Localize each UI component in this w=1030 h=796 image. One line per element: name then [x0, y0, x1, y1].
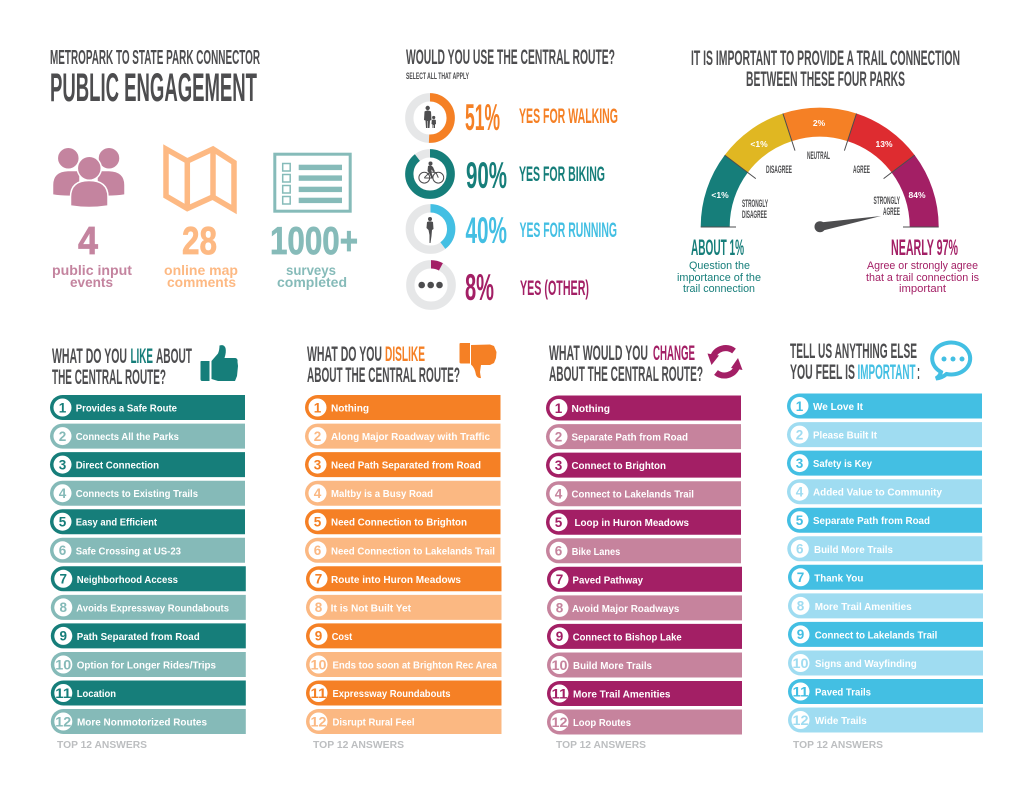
donut: 40%: [410, 208, 451, 250]
gauge chart: 13%: [875, 139, 893, 149]
gauge chart: DISAGREE: [742, 209, 767, 221]
row 8: It is Not Built Yet: [331, 603, 412, 614]
panel: biking: [409, 153, 605, 196]
text: WOULD YOU USE THE CENTRAL ROUTE?: [406, 46, 615, 69]
callout: nearly 97%: that a trail connection is: [866, 272, 979, 284]
row 7: [51, 566, 246, 591]
panel: other: [410, 264, 589, 308]
row 4: Maltby is a Busy Road: [331, 489, 433, 500]
text: YES FOR RUNNING: [520, 219, 617, 242]
panel: biking: 90%: [466, 155, 507, 196]
callout: nearly 97%: NEARLY 97%: [891, 235, 958, 260]
row 8: [306, 595, 502, 620]
icon: thumbs down: [460, 343, 496, 378]
row 1: [546, 396, 741, 420]
icon: people: [52, 147, 125, 208]
row 8: 8: [315, 600, 323, 615]
row 9: [547, 624, 742, 649]
row 8: [51, 595, 246, 620]
row 2: [50, 424, 245, 449]
heading: tell us anything else: [790, 340, 920, 384]
row 6: 6: [59, 543, 67, 558]
row 7: 7: [60, 572, 67, 587]
footnote: TOP 12 ANSWERS: [556, 739, 646, 751]
callout: nearly 97%: important: [899, 283, 946, 295]
gauge chart: NEUTRAL: [807, 150, 830, 162]
panel: walking: 51%: [465, 97, 500, 138]
row 4: [50, 481, 245, 506]
stat: surveys completed: 1000+: [270, 220, 358, 263]
row 4: 4: [796, 485, 804, 500]
row 10: [788, 650, 983, 676]
row 7: Route into Huron Meadows: [331, 575, 461, 586]
row 11: [788, 679, 983, 704]
heading: what do you like: [52, 345, 192, 389]
heading: what would you change: CHANGE: [653, 342, 695, 365]
row 12: 12: [310, 714, 326, 729]
stat: online map comments: 28: [182, 220, 217, 263]
row 1: Provides a Safe Route: [76, 404, 177, 414]
row 11: [306, 680, 502, 706]
row 2: 2: [314, 429, 321, 444]
row 10: Ends too soon at Brighton Rec Area: [332, 660, 497, 672]
row 1: Nothing: [331, 404, 369, 414]
row 2: [546, 424, 741, 449]
row 1: [787, 394, 982, 418]
heading: what do you like: WHAT DO YOU: [52, 345, 127, 368]
row 4: [787, 479, 982, 504]
gauge chart: 84%: [908, 190, 926, 200]
row 9: Cost: [332, 632, 353, 643]
row 5: 5: [314, 515, 322, 530]
row 6: [50, 538, 245, 563]
icon: map: [166, 149, 234, 210]
row 12: Wide Trails: [815, 716, 867, 727]
row 5: Loop in Huron Meadows: [574, 518, 689, 529]
stat: surveys completed: surveys: [286, 262, 336, 278]
row 12: [547, 710, 742, 734]
row 6: Need Connection to Lakelands Trail: [331, 546, 495, 557]
gauge chart: AGREE: [883, 206, 900, 218]
title: [50, 46, 260, 110]
row 12: More Nonmotorized Routes: [77, 718, 207, 728]
panel: walking: [409, 97, 618, 139]
row 5: 5: [59, 515, 67, 530]
callout: about 1%: trail connection: [683, 283, 755, 295]
icon: survey form: [275, 154, 350, 211]
row 3: [50, 452, 245, 477]
row 12: 12: [792, 713, 808, 728]
donut: 90%: [409, 153, 451, 195]
row 3: 3: [555, 458, 563, 473]
row 11: More Trail Amenities: [573, 690, 671, 700]
callout: nearly 97%: [866, 235, 979, 295]
icon: cycle arrows: [708, 348, 742, 375]
row 10: [51, 652, 246, 677]
row 3: Direct Connection: [76, 461, 159, 472]
row 7: 7: [556, 572, 563, 587]
panel: like: ABOUT: [156, 345, 192, 368]
icon: thumbs up: [200, 345, 238, 381]
heading: would you use the central route: SELECT ALL THAT APPLY: [406, 71, 469, 82]
row 6: [787, 536, 982, 561]
stat: online map comments: comments: [167, 274, 236, 290]
row 1: 1: [555, 401, 563, 416]
row 4: [305, 481, 500, 506]
row 9: Path Separated from Road: [77, 632, 200, 643]
panel: engagement stats: [52, 147, 358, 290]
row 2: 2: [59, 429, 66, 444]
row 1: 1: [314, 400, 322, 415]
row 12: Disrupt Rural Feel: [332, 718, 415, 728]
callout: about 1%: [677, 235, 761, 295]
panel: change: [546, 342, 742, 751]
panel: dislike: ABOUT THE CENTRAL ROUTE?: [307, 364, 460, 387]
gauge needle: [814, 216, 881, 232]
row 8: 8: [797, 599, 805, 614]
footnote: TOP 12 ANSWERS: [793, 739, 883, 751]
heading: what do you dislike: DISLIKE: [385, 343, 425, 366]
heading: what do you like: LIKE: [130, 345, 153, 368]
heading: what do you like: THE CENTRAL ROUTE?: [52, 366, 166, 389]
icon: runner: [426, 217, 434, 243]
row 1: 1: [796, 399, 804, 414]
row 6: Build More Trails: [814, 545, 893, 556]
row 8: More Trail Amenities: [815, 602, 912, 613]
row 7: [547, 567, 742, 592]
row 8: 8: [60, 600, 68, 615]
gauge chart: <1%: [750, 139, 768, 149]
row 6: Safe Crossing at US-23: [76, 546, 181, 557]
stat: surveys completed: completed: [277, 274, 347, 290]
row 8: 8: [556, 601, 564, 616]
row 12: [51, 709, 246, 734]
gauge chart: 2%: [813, 118, 826, 128]
callout: about 1%: ABOUT 1%: [691, 235, 744, 260]
stat: public input events: 4: [78, 220, 98, 263]
row 3: [305, 452, 500, 477]
heading: what would you change: [549, 342, 703, 386]
row 10: 10: [55, 657, 71, 672]
row 2: [787, 422, 982, 447]
icon: adult and child walking: [424, 106, 436, 128]
icon: cyclist: [419, 162, 444, 183]
row 3: Connect to Brighton: [572, 461, 666, 472]
row 3: 3: [314, 457, 322, 472]
row 11: Location: [77, 689, 116, 700]
row 2: 2: [796, 427, 803, 442]
row 7: 7: [797, 570, 804, 585]
row 7: [788, 565, 983, 590]
row 6: 6: [796, 542, 804, 557]
callout: about 1%: Question the: [689, 260, 750, 272]
row 3: 3: [59, 457, 67, 472]
callout: nearly 97%: Agree or strongly agree: [867, 260, 978, 272]
heading: what do you dislike: WHAT DO YOU: [307, 343, 382, 366]
text: METROPARK TO STATE PARK CONNECTOR: [50, 46, 260, 69]
gauge chart: DISAGREE: [766, 164, 792, 176]
row 3: Safety is Key: [813, 459, 872, 470]
row 7: Neighborhood Access: [77, 575, 178, 586]
row 12: Loop Routes: [573, 718, 631, 729]
stat: public input events: [52, 220, 132, 290]
row 7: 7: [315, 572, 322, 587]
heading: trail connection importance: [691, 47, 960, 91]
row 11: Expressway Roundabouts: [332, 689, 451, 700]
row 12: [306, 709, 502, 734]
heading: tell us anything else: IMPORTANT: [858, 361, 916, 384]
panel: like: [50, 345, 246, 751]
panel: other: 8%: [465, 267, 494, 308]
gauge chart: [701, 108, 939, 232]
row 11: [51, 680, 246, 706]
row 2: Along Major Roadway with Traffic: [331, 432, 490, 443]
row 6: 6: [555, 544, 563, 559]
row 1: We Love It: [813, 402, 864, 413]
panel: anything else: [787, 340, 983, 751]
panel: running: [410, 208, 617, 251]
row 9: [788, 622, 983, 647]
row 8: [788, 593, 983, 618]
row 11: 11: [792, 684, 809, 699]
row 9: [51, 623, 246, 648]
row 1: [50, 395, 245, 420]
row 6: [546, 538, 741, 563]
row 6: Bike Lanes: [572, 547, 621, 558]
row 8: [547, 595, 742, 620]
gauge chart: STRONGLY: [742, 198, 768, 210]
panel: other: YES (OTHER): [520, 277, 589, 300]
row 9: Connect to Lakelands Trail: [815, 630, 937, 641]
heading: what would you change: WHAT WOULD YOU: [549, 342, 648, 365]
row 5: [546, 510, 741, 535]
gauge chart: AGREE: [853, 164, 870, 176]
gauge chart: STRONGLY: [874, 195, 900, 207]
row 1: 1: [59, 400, 67, 415]
row 5: 5: [796, 513, 804, 528]
row 7: [306, 566, 502, 591]
row 3: Need Path Separated from Road: [331, 461, 481, 472]
callout: about 1%: importance of the: [677, 272, 761, 284]
row 4: 4: [555, 487, 563, 502]
stat: public input events: public input: [52, 262, 132, 278]
row 2: Separate Path from Road: [572, 433, 688, 444]
row 10: 10: [310, 657, 326, 672]
row 2: [305, 424, 500, 449]
row 10: [547, 652, 742, 678]
row 10: Option for Longer Rides/Trips: [77, 660, 216, 672]
donut: 8%: [410, 264, 452, 306]
row 3: 3: [796, 456, 804, 471]
row 4: 4: [59, 486, 67, 501]
row 9: [306, 623, 502, 648]
row 5: [50, 509, 245, 534]
row 11: [547, 681, 742, 706]
row 4: Added Value to Community: [813, 488, 942, 499]
row 1: [305, 395, 500, 420]
row 2: Connects All the Parks: [76, 432, 179, 443]
row 9: Connect to Bishop Lake: [573, 632, 682, 643]
row 5: 5: [555, 515, 563, 530]
row 4: [546, 481, 741, 506]
stat: online map comments: [164, 220, 238, 290]
row 5: [305, 509, 500, 534]
heading: tell us anything else: YOU FEEL IS: [790, 361, 855, 384]
text: PUBLIC ENGAGEMENT: [50, 66, 257, 110]
row 4: Connect to Lakelands Trail: [572, 490, 694, 501]
row 6: 6: [314, 543, 322, 558]
donut: 51%: [409, 97, 451, 139]
gauge chart: <1%: [711, 190, 729, 200]
row 3: [546, 453, 741, 478]
row 8: Avoid Major Roadways: [572, 604, 680, 615]
stat: online map comments: online map: [164, 262, 238, 278]
row 7: Thank You: [814, 573, 863, 584]
row 5: [787, 508, 982, 533]
row 9: 9: [797, 627, 804, 642]
stat: public input events: events: [70, 274, 113, 290]
row 12: [788, 708, 983, 732]
row 9: 9: [556, 629, 563, 644]
row 6: [305, 538, 500, 563]
footnote: TOP 12 ANSWERS: [313, 739, 404, 751]
icon: three dots: [418, 282, 443, 288]
row 3: [787, 451, 982, 476]
row 5: Easy and Efficient: [76, 518, 158, 529]
row 4: Connects to Existing Trails: [76, 489, 198, 500]
panel: change: ABOUT THE CENTRAL ROUTE?: [549, 363, 703, 386]
row 10: Build More Trails: [573, 661, 652, 672]
row 11: 11: [310, 686, 327, 701]
row 2: 2: [555, 429, 562, 444]
row 7: Paved Pathway: [572, 575, 643, 586]
row 10: [306, 652, 502, 677]
footnote: TOP 12 ANSWERS: [57, 739, 147, 751]
row 5: Separate Path from Road: [813, 516, 930, 527]
panel: running: 40%: [466, 210, 507, 251]
stat: surveys completed: [270, 220, 358, 290]
panel: anything else: :: [917, 361, 920, 384]
row 10: 10: [552, 658, 568, 673]
row 10: Signs and Wayfinding: [815, 659, 917, 670]
heading: would you use the central route: [406, 46, 615, 82]
row 8: Avoids Expressway Roundabouts: [76, 603, 229, 614]
panel: walking: YES FOR WALKING: [519, 105, 618, 128]
row 11: 11: [552, 686, 568, 701]
panel: dislike: [305, 343, 502, 751]
row 5: Need Connection to Brighton: [331, 518, 467, 529]
row 2: Please Built It: [813, 431, 878, 442]
row 11: 11: [55, 686, 72, 701]
row 11: Paved Trails: [815, 688, 871, 698]
row 9: 9: [60, 629, 67, 644]
heading: what do you dislike: [307, 343, 460, 387]
row 9: 9: [315, 629, 322, 644]
row 10: 10: [792, 656, 808, 671]
icon: speech bubble: [932, 342, 970, 378]
panel: biking: YES FOR BIKING: [519, 163, 605, 186]
row 4: 4: [314, 486, 322, 501]
row 12: 12: [55, 714, 71, 729]
row 12: 12: [552, 715, 568, 730]
row 1: Nothing: [572, 404, 610, 415]
